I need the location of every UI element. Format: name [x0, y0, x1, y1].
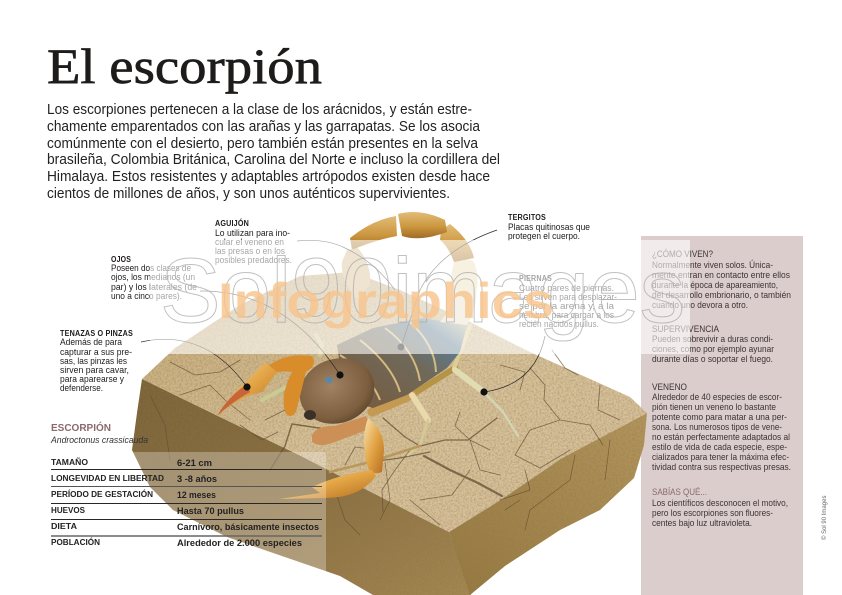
panel text: sabías qué: SABÍAS QUÉ...	[652, 486, 707, 497]
callout: piernas: se por la arena y, a la	[519, 301, 614, 311]
illustration: cracked earth block	[125, 265, 655, 595]
right claw arm	[312, 416, 372, 445]
callout: tergitos: Placas quitinosas que	[508, 222, 590, 232]
panel text: sabías qué: Los científicos desconocen el motivo,	[652, 497, 788, 508]
panel text: cómo viven: del desarrollo embrionario, o también	[652, 289, 791, 300]
panel text: sabías qué: centes bajo luz ultravioleta.	[652, 517, 752, 528]
left pincer	[217, 362, 277, 416]
callout: tergitos: protegen el cuerpo.	[508, 231, 580, 241]
species data table: Hasta 70 pullus	[177, 506, 244, 517]
lightening panel behind data table	[127, 452, 326, 573]
callout: aguijón: Lo utilizan para ino-	[215, 228, 290, 238]
leader lines	[141, 230, 545, 392]
callout: ojos	[111, 255, 197, 301]
intro text: Los escorpiones pertenecen a la clase de los arácnidos, y están estre-	[47, 102, 472, 118]
species data table: 12 meses	[177, 490, 216, 501]
abdomen	[337, 318, 467, 408]
callout: tenazas o pinzas: sas, las pinzas les	[60, 356, 127, 366]
species data table: Androctonus crassicauda	[50, 435, 148, 446]
species data table: PERÍODO DE GESTACIÓN	[51, 488, 153, 499]
panel text: sabías qué	[652, 486, 788, 528]
panel text: veneno: no están perfectamente adaptados al	[652, 431, 790, 442]
panel text: supervivencia: ciones, como por ejemplo ayunar	[652, 343, 774, 354]
callout: piernas: Cuatro pares de piernas.	[519, 283, 614, 293]
panel text: cómo viven: durante la época de apareamiento,	[652, 279, 778, 290]
callout: piernas: Les sirven para desplazar-	[519, 292, 617, 302]
intro text: cientos de millones de años, y son unos auténticos supervivientes.	[47, 186, 450, 202]
callout: ojos: OJOS	[111, 255, 131, 264]
callout: aguijón: AGUIJÓN	[215, 219, 249, 228]
callout: aguijón: cular el veneno en	[215, 237, 284, 247]
panel text: supervivencia: Pueden sobrevivir a duras condi-	[652, 333, 773, 344]
callout: tenazas o pinzas: sirven para cavar,	[60, 365, 129, 375]
panel text: cómo viven	[652, 248, 791, 310]
species data table: Alrededor de 2.000 especies	[177, 538, 302, 549]
callout: tenazas o pinzas: TENAZAS O PINZAS	[60, 329, 133, 338]
watermark: Sol90images	[160, 240, 685, 342]
tail	[342, 212, 478, 325]
legs	[262, 326, 518, 472]
panel: side information background	[641, 236, 803, 595]
callout: tenazas o pinzas: para aparearse y	[60, 374, 124, 384]
credit: © Sol 90 Images	[821, 496, 828, 540]
callout: ojos: Poseen dos clases de	[111, 263, 191, 273]
panel text: cómo viven: Normalmente viven solos. Única-	[652, 259, 773, 270]
callout: piernas: recién nacidos pullus.	[519, 319, 599, 329]
panel text: veneno	[652, 381, 791, 472]
panel text: veneno: Alrededor de 40 especies de escor-	[652, 391, 782, 402]
species data table	[50, 421, 322, 549]
panel text: supervivencia: durante días o soportar el fuego.	[652, 353, 773, 364]
abdomen stripes	[340, 322, 436, 400]
panel text: veneno: tividad contra sus respectivas presas.	[652, 461, 791, 472]
pointer dot: tergitos	[398, 344, 404, 350]
panel text: supervivencia	[652, 323, 774, 364]
title: El escorpión	[47, 38, 322, 94]
callout: piernas: PIERNAS	[519, 274, 552, 283]
species data table: 6-21 cm	[177, 458, 212, 469]
species data table: ESCORPIÓN	[51, 421, 111, 434]
species data table: POBLACIÓN	[51, 536, 100, 547]
callout: tergitos: TERGITOS	[508, 213, 546, 222]
watermark: Infographics	[218, 273, 554, 329]
callout: piernas	[519, 274, 617, 329]
face cracks	[150, 395, 610, 535]
callout: ojos: par) y los laterales (de	[111, 282, 197, 292]
panel text: veneno: cializados para tener la máxima efec-	[652, 451, 789, 462]
callout: tenazas o pinzas: capturar a sus pre-	[60, 347, 132, 357]
panel text: veneno: sona. Los numerosos tipos de vene-	[652, 421, 782, 432]
intro text: Himalaya. Estos resistentes y adaptables artrópodos existen desde hace	[47, 169, 490, 185]
illustration: scorpion	[217, 212, 518, 499]
panel text: veneno: potente como para matar a una per-	[652, 411, 787, 422]
central eyes	[326, 376, 332, 384]
right pincer lower	[279, 470, 376, 499]
lightening band over upper illustration	[150, 240, 690, 354]
species data table: Carnívoro, básicamente insectos	[177, 522, 319, 533]
panel text: cómo viven: cuando uno devora a otro.	[652, 299, 748, 310]
species data table: TAMAÑO	[51, 457, 88, 467]
carapace	[290, 348, 384, 434]
intro text	[47, 102, 500, 202]
callout: tenazas o pinzas: Además de para	[60, 337, 122, 347]
panel text: cómo viven: mente entran en contacto entre ellos	[652, 269, 790, 280]
panel text: veneno: VENENO	[652, 381, 687, 392]
callout: tenazas o pinzas: defenderse.	[60, 383, 103, 393]
surface cracks	[170, 350, 620, 525]
species data table: HUEVOS	[51, 505, 85, 515]
panel text: cómo viven: ¿CÓMO VIVEN?	[652, 248, 713, 259]
callout: ojos: ojos, los medianos (un	[111, 272, 195, 282]
right pincer upper	[364, 418, 384, 473]
panel text: veneno: pión tienen un veneno lo bastante	[652, 401, 776, 412]
callout: aguijón	[215, 219, 292, 265]
callout: aguijón: las presas o en los	[215, 246, 285, 256]
species data table: DIETA	[51, 521, 77, 531]
callout: aguijón: posibles predadores.	[215, 255, 292, 265]
intro text: comúnmente con el desierto, pero también están presentes en la selva	[47, 136, 479, 152]
left claw arm	[265, 355, 314, 416]
pointer dots	[243, 371, 488, 396]
species data table: 3 -8 años	[177, 474, 217, 485]
panel text: supervivencia: SUPERVIVENCIA	[652, 323, 720, 334]
panel text: sabías qué: pero los escorpiones son fluores-	[652, 507, 773, 518]
intro text: brasileña, Colombia Británica, Carolina del Norte e incluso la cordillera del	[47, 152, 500, 168]
callout: piernas: hembra, para cargar a los	[519, 310, 614, 320]
panel text: veneno: estilo de vida de cada especie, espe-	[652, 441, 787, 452]
callout: tenazas o pinzas	[60, 329, 133, 393]
intro text: chamente emparentados con las arañas y las garrapatas. Se los asocia	[47, 119, 481, 135]
species data table: LONGEVIDAD EN LIBERTAD	[51, 473, 164, 483]
callout: ojos: uno a cinco pares).	[111, 291, 182, 301]
callout: tergitos	[508, 213, 590, 241]
